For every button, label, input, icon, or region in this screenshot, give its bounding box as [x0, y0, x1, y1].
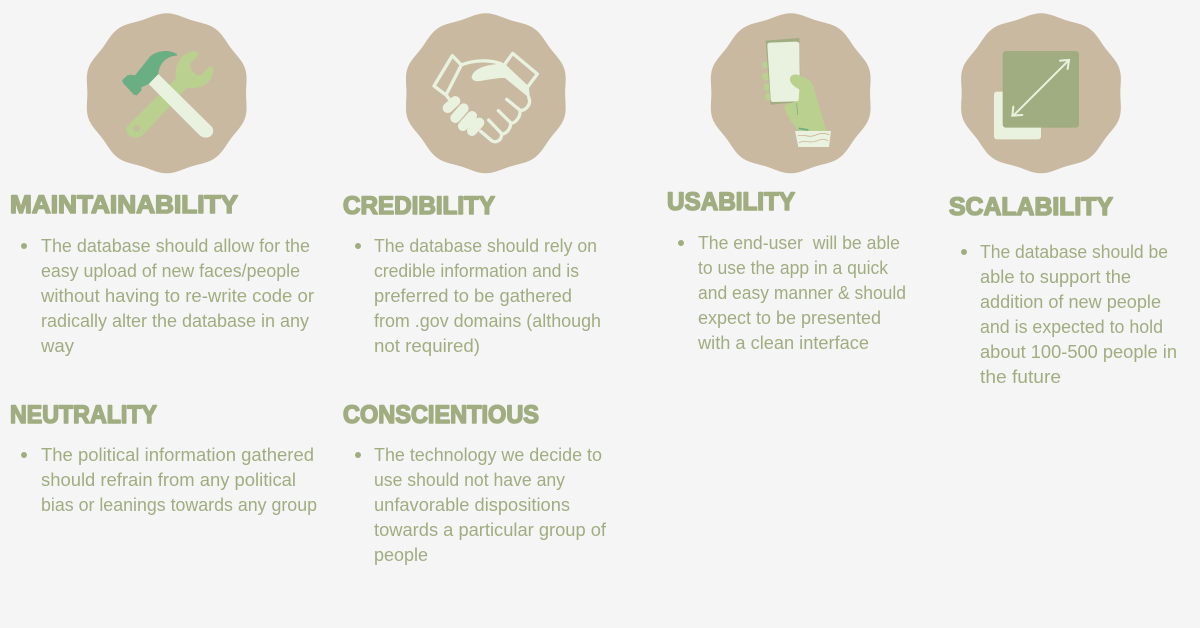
text block: maintainability bullet — [21, 236, 314, 356]
panel: scalability — [949, 193, 1177, 387]
panel: neutrality — [10, 401, 317, 515]
text block: scalability bullet: able to support the — [980, 267, 1131, 287]
text block: usability bullet: and easy manner & should — [698, 283, 906, 303]
text block: usability bullet: to use the app in a quick — [698, 258, 889, 278]
text block: credibility bullet — [355, 236, 601, 356]
text block: scalability bullet — [961, 242, 1177, 387]
text block: conscientious bullet: The technology we decide to — [374, 445, 602, 465]
text block: scalability bullet: the future — [980, 367, 1061, 387]
icon: scale squares badge — [961, 13, 1121, 173]
text block: conscientious bullet: use should not have any — [374, 470, 565, 490]
text block: conscientious bullet: towards a particular group of — [374, 520, 607, 540]
panel: maintainability — [10, 191, 314, 356]
text block: neutrality bullet: The political information gathered — [41, 445, 314, 465]
text block: credibility bullet: The database should rely on — [374, 236, 597, 256]
heading: scalability: SCALABILITY — [949, 193, 1113, 221]
icon: hand holding phone badge — [711, 13, 871, 173]
icon: hammer and wrench badge — [87, 13, 247, 173]
text block: neutrality bullet — [21, 445, 317, 515]
heading: credibility: CREDIBILITY — [343, 192, 495, 220]
text block: credibility bullet: from .gov domains (although — [374, 311, 601, 331]
heading: usability: USABILITY — [667, 188, 795, 216]
text block: maintainability bullet: radically alter the database in any — [41, 311, 309, 331]
heading: conscientious: CONSCIENTIOUS — [343, 401, 539, 429]
text block: usability bullet: with a clean interface — [697, 333, 869, 353]
heading: maintainability: MAINTAINABILITY — [10, 191, 238, 219]
panel: usability — [667, 188, 906, 353]
text block: conscientious bullet: unfavorable dispositions — [374, 495, 570, 515]
text block: neutrality bullet: should refrain from any political — [41, 470, 296, 490]
text block: credibility bullet: credible information and is — [374, 261, 579, 281]
icon: handshake badge — [406, 13, 566, 173]
text block: conscientious bullet — [355, 445, 607, 565]
text block: maintainability bullet: way — [40, 336, 74, 356]
text block: usability bullet: expect to be presented — [698, 308, 881, 328]
text block: scalability bullet: addition of new people — [980, 292, 1161, 312]
text block: neutrality bullet: bias or leanings towards any group — [41, 495, 317, 515]
text block: scalability bullet: The database should be — [980, 242, 1168, 262]
text block: conscientious bullet: people — [374, 545, 428, 565]
text block: maintainability bullet: easy upload of new faces/people — [41, 261, 300, 281]
text block: credibility bullet: preferred to be gathered — [374, 286, 572, 306]
text block: scalability bullet: about 100-500 people in — [980, 342, 1177, 362]
panel: credibility — [343, 192, 601, 356]
text block: scalability bullet: and is expected to hold — [980, 317, 1163, 337]
text block: usability bullet — [678, 233, 906, 353]
text block: credibility bullet: not required) — [374, 336, 480, 356]
text block: maintainability bullet: The database should allow for the — [41, 236, 310, 256]
heading: neutrality: NEUTRALITY — [10, 401, 157, 429]
text block: usability bullet: The end-user will be able — [698, 233, 900, 253]
panel: conscientious — [343, 401, 607, 565]
text block: maintainability bullet: without having to re-write code or — [40, 286, 314, 306]
